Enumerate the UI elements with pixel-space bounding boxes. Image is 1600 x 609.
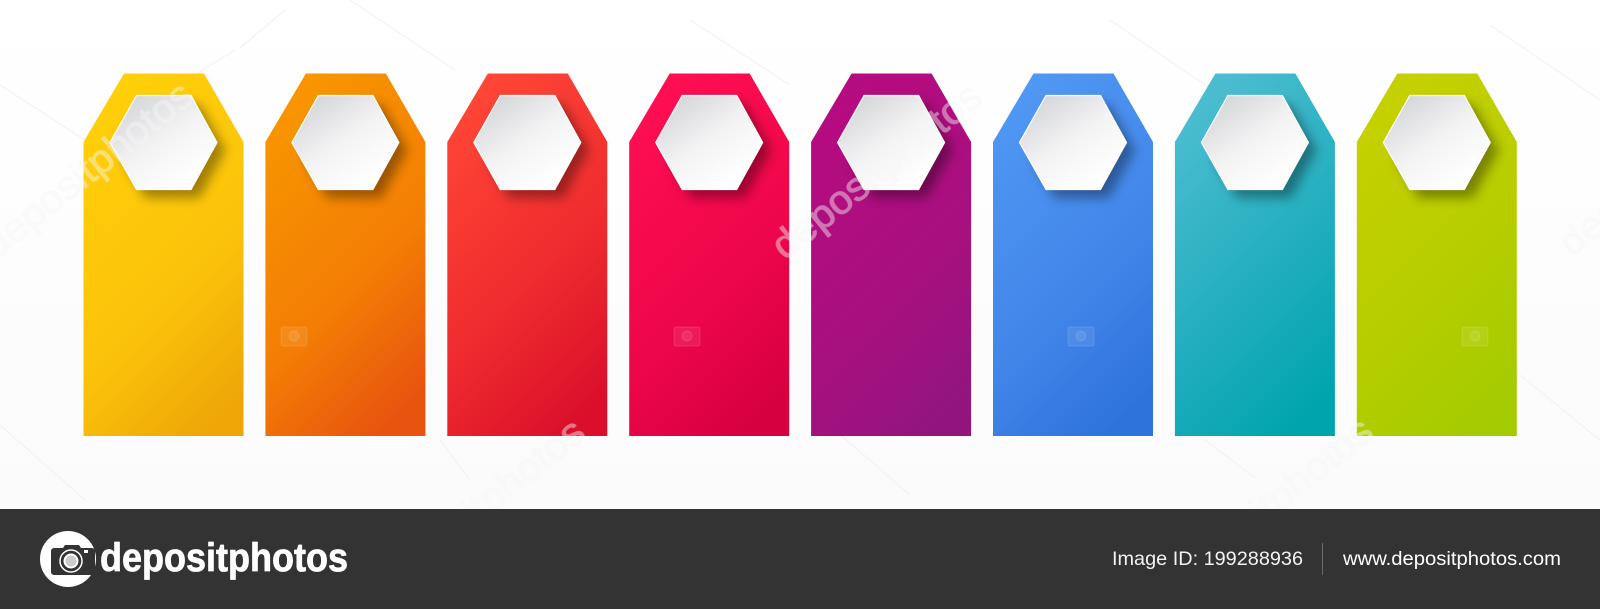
card 8: lime xyxy=(1357,74,1517,436)
hexagon shadow 2 xyxy=(305,104,407,198)
card 6: blue xyxy=(993,74,1153,436)
hexagon 7 xyxy=(1201,96,1308,190)
watermarks: depositphotos xyxy=(366,410,593,604)
card 2: orange xyxy=(265,74,425,436)
card 1: yellow xyxy=(84,74,244,436)
hexagon shadow 6 xyxy=(1033,104,1135,198)
logo icon: camera in circle xyxy=(40,531,96,587)
hexagon shadow 4 xyxy=(669,104,771,198)
hexagon 4 xyxy=(656,96,763,190)
watermarks: depositphotos xyxy=(1154,409,1381,603)
watermarks: depositphotos xyxy=(763,74,990,268)
hexagon 3 xyxy=(474,96,581,190)
hexagon 5 xyxy=(838,96,945,190)
hexagon shadow 5 xyxy=(851,104,953,198)
image id: Image ID: 199288936 xyxy=(1112,548,1303,570)
card 7: teal xyxy=(1175,74,1335,436)
card 5: purple xyxy=(811,74,971,436)
logo wordmark: depositphotos xyxy=(100,536,348,580)
card 3: red xyxy=(447,74,607,436)
hexagon shadow 8 xyxy=(1397,104,1499,198)
hexagon shadow 3 xyxy=(487,104,589,198)
hexagon 1 xyxy=(110,96,217,190)
hexagon 8 xyxy=(1383,96,1490,190)
watermark camera icons xyxy=(281,327,1488,346)
hexagon shadow 7 xyxy=(1215,104,1317,198)
hexagon shadow 1 xyxy=(124,104,226,198)
hexagon 2 xyxy=(292,96,399,190)
card 4: crimson xyxy=(629,74,789,436)
divider xyxy=(1322,543,1323,575)
hexagon 6 xyxy=(1020,96,1126,190)
website url: www.depositphotos.com xyxy=(1342,548,1561,570)
footer bar xyxy=(0,509,1600,609)
